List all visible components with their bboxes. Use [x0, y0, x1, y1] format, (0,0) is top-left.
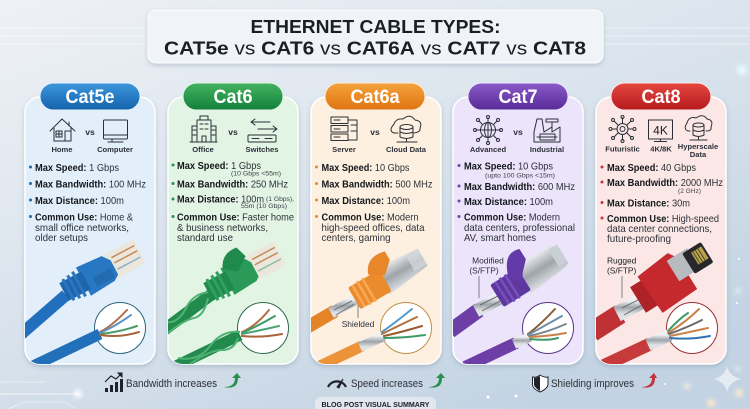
panel: Cat6a	[306, 83, 441, 366]
icon: switches	[248, 119, 277, 142]
cable: red shielded connector	[596, 242, 718, 364]
heading: Cat6a pill: Cat6a	[350, 87, 400, 108]
cable: blue connector	[20, 237, 147, 366]
icon: home	[50, 119, 75, 141]
label: Shielded: Shielded	[342, 319, 375, 329]
panel: Cat6	[164, 83, 298, 366]
title: CAT5e vs CAT6 vs CAT6A vs CAT7 vs CAT8	[164, 38, 586, 58]
text block: specs: & business networks,	[177, 223, 268, 234]
text block: specs: Common Use: Home &	[35, 212, 133, 224]
cable: green connector	[168, 242, 289, 364]
text block: specs: centers, gaming	[322, 233, 391, 244]
icon: cloud data	[391, 116, 421, 142]
heading: Cat7 pill: Cat7	[498, 87, 538, 108]
panel: Cat8: 4K/8K	[650, 144, 672, 154]
footer: bandwidth increases: Bandwidth increases	[126, 378, 217, 390]
heading: Cat6 pill	[183, 83, 283, 110]
text block: specs: AV, smart homes	[464, 233, 536, 244]
text block: specs: Max Distance: 100m	[35, 196, 124, 207]
footer: shielding improves	[532, 373, 657, 392]
text block: specs: data center connections,	[607, 224, 712, 235]
panel: Cat7: Advanced	[470, 145, 507, 154]
panel: Cat5e	[20, 83, 155, 366]
text block: specs	[29, 163, 146, 244]
callout: wire detail	[465, 302, 574, 367]
text block: specs: Common Use: Modern	[322, 212, 419, 224]
text block: specs: Max Bandwidth: 500 MHz	[322, 180, 432, 190]
panel: Cat6: vs	[228, 127, 238, 137]
text block: specs: Max Distance: 100m	[177, 194, 264, 206]
text block: specs: Max Bandwidth: 100 MHz	[35, 180, 146, 190]
cable: purple shielded connector	[453, 244, 574, 364]
label: Rugged (S/FTP): Rugged	[607, 256, 637, 266]
label: Modified (S/FTP)	[469, 256, 504, 298]
text block: specs: Max Speed: 10 Gbps	[322, 163, 410, 174]
label: Rugged (S/FTP): (S/FTP)	[607, 266, 637, 276]
panel: Cat8: Futuristic	[605, 144, 640, 154]
panel: Cat7: vs	[513, 127, 523, 137]
text block: specs: Max Distance: 100m	[464, 197, 553, 208]
heading: Cat8 pill	[611, 83, 711, 110]
panel: Cat8	[592, 83, 726, 366]
text block: specs: 55m (10 Gbps)	[241, 203, 287, 210]
panel: Cat7	[450, 83, 583, 367]
icon: industrial	[534, 119, 560, 142]
heading: Cat6 pill: Cat6	[214, 87, 252, 108]
footer: shielding improves: Shielding improves	[551, 378, 634, 390]
title: ETHERNET CABLE TYPES:	[250, 17, 500, 37]
text block: specs	[315, 163, 432, 244]
callout: wire detail	[176, 302, 288, 366]
text block: specs	[458, 162, 575, 244]
text block: specs: Common Use: Modern	[464, 212, 560, 224]
arrow: green	[428, 373, 445, 388]
badge: blog post visual summary: BLOG POST VISUAL SUMMARY	[322, 400, 430, 409]
panel: Cat7: Industrial	[530, 145, 564, 154]
footer: speed increases: Speed increases	[351, 378, 423, 390]
label: Modified (S/FTP): Modified	[472, 256, 504, 266]
icon: computer	[104, 120, 128, 142]
text block: specs: Max Distance: 100m	[322, 196, 410, 207]
icon: sparkle star	[714, 366, 741, 392]
text block: specs: Max Bandwidth: 250 MHz	[177, 180, 288, 190]
text block: specs: Max Speed: 40 Gbps	[607, 163, 696, 174]
heading: Cat8 pill: Cat8	[642, 87, 680, 108]
heading: Cat7 pill	[468, 83, 568, 110]
cable: orange shielded connector	[311, 248, 432, 364]
heading: Cat5e pill: Cat5e	[66, 87, 114, 108]
label: Modified (S/FTP): (S/FTP)	[469, 266, 499, 276]
text block: specs: (2 GHz)	[678, 188, 701, 195]
text block: specs: older setups	[35, 233, 88, 244]
arrow: red	[641, 373, 657, 388]
icon: 4K monitor	[648, 120, 672, 142]
panel: Cat5e: vs	[85, 127, 95, 137]
footer: bandwidth increases	[105, 373, 241, 392]
icon: 4K monitor: 4K	[653, 124, 668, 138]
text block: specs: (upto 100 Gbps <15m)	[485, 172, 555, 180]
title	[148, 10, 603, 63]
footer: speed increases	[328, 373, 445, 390]
text block: specs: Max Speed: 10 Gbps	[464, 162, 553, 172]
text block: specs: high-speed offices, data	[322, 223, 425, 234]
panel: Cat8: Hyperscale	[678, 142, 718, 151]
icon: speedometer	[328, 379, 346, 388]
icon: office	[190, 116, 217, 142]
panel: Cat8: Data	[690, 150, 707, 159]
text block: specs	[172, 161, 294, 244]
text block: specs: data centers, professional	[464, 223, 575, 234]
text block: specs: Max Speed: 1 Gbps	[177, 161, 261, 172]
text block: specs: (1 Gbps),	[266, 196, 294, 203]
heading: Cat5e pill	[40, 83, 140, 110]
icon: futuristic	[609, 116, 636, 142]
callout: wire detail	[320, 302, 432, 366]
badge: blog post visual summary	[315, 397, 436, 409]
text block: specs: standard use	[177, 233, 233, 244]
text block: specs: future-proofing	[607, 234, 671, 245]
text block: specs: small office networks,	[35, 223, 129, 234]
icon: server	[331, 117, 357, 140]
text block: specs: Max Bandwidth: 600 MHz	[464, 182, 575, 193]
text block: specs: Max Speed: 1 Gbps	[35, 163, 119, 174]
text block: specs: Max Bandwidth: 2000 MHz	[607, 178, 723, 189]
panel: Cat5e: Home	[51, 145, 73, 154]
panel: Cat5e: Computer	[97, 145, 133, 154]
text block: specs: Common Use: Faster home	[177, 212, 294, 224]
icon: shield	[532, 375, 548, 392]
text block: specs: Common Use: High-speed	[607, 214, 719, 225]
callout: wire detail	[603, 302, 718, 366]
panel: Cat6: Office	[192, 145, 214, 154]
panel: Cat6: Switches	[246, 145, 278, 154]
panel: Cat6a: vs	[370, 127, 380, 137]
heading: Cat6a pill	[325, 83, 425, 110]
arrow: green	[224, 373, 241, 388]
panel: Cat6a: Cloud Data	[386, 145, 427, 154]
label: Rugged (S/FTP)	[607, 256, 637, 298]
icon: hyperscale data	[685, 116, 712, 140]
icon: bar chart with arrow	[105, 373, 123, 392]
callout: wire detail	[33, 302, 146, 366]
panel: Cat6a: Server	[332, 145, 356, 154]
text block: specs: (10 Gbps <55m)	[231, 170, 281, 178]
text block: specs	[600, 163, 723, 245]
text block: specs: Max Distance: 30m	[607, 198, 690, 210]
icon: advanced network	[474, 116, 502, 144]
